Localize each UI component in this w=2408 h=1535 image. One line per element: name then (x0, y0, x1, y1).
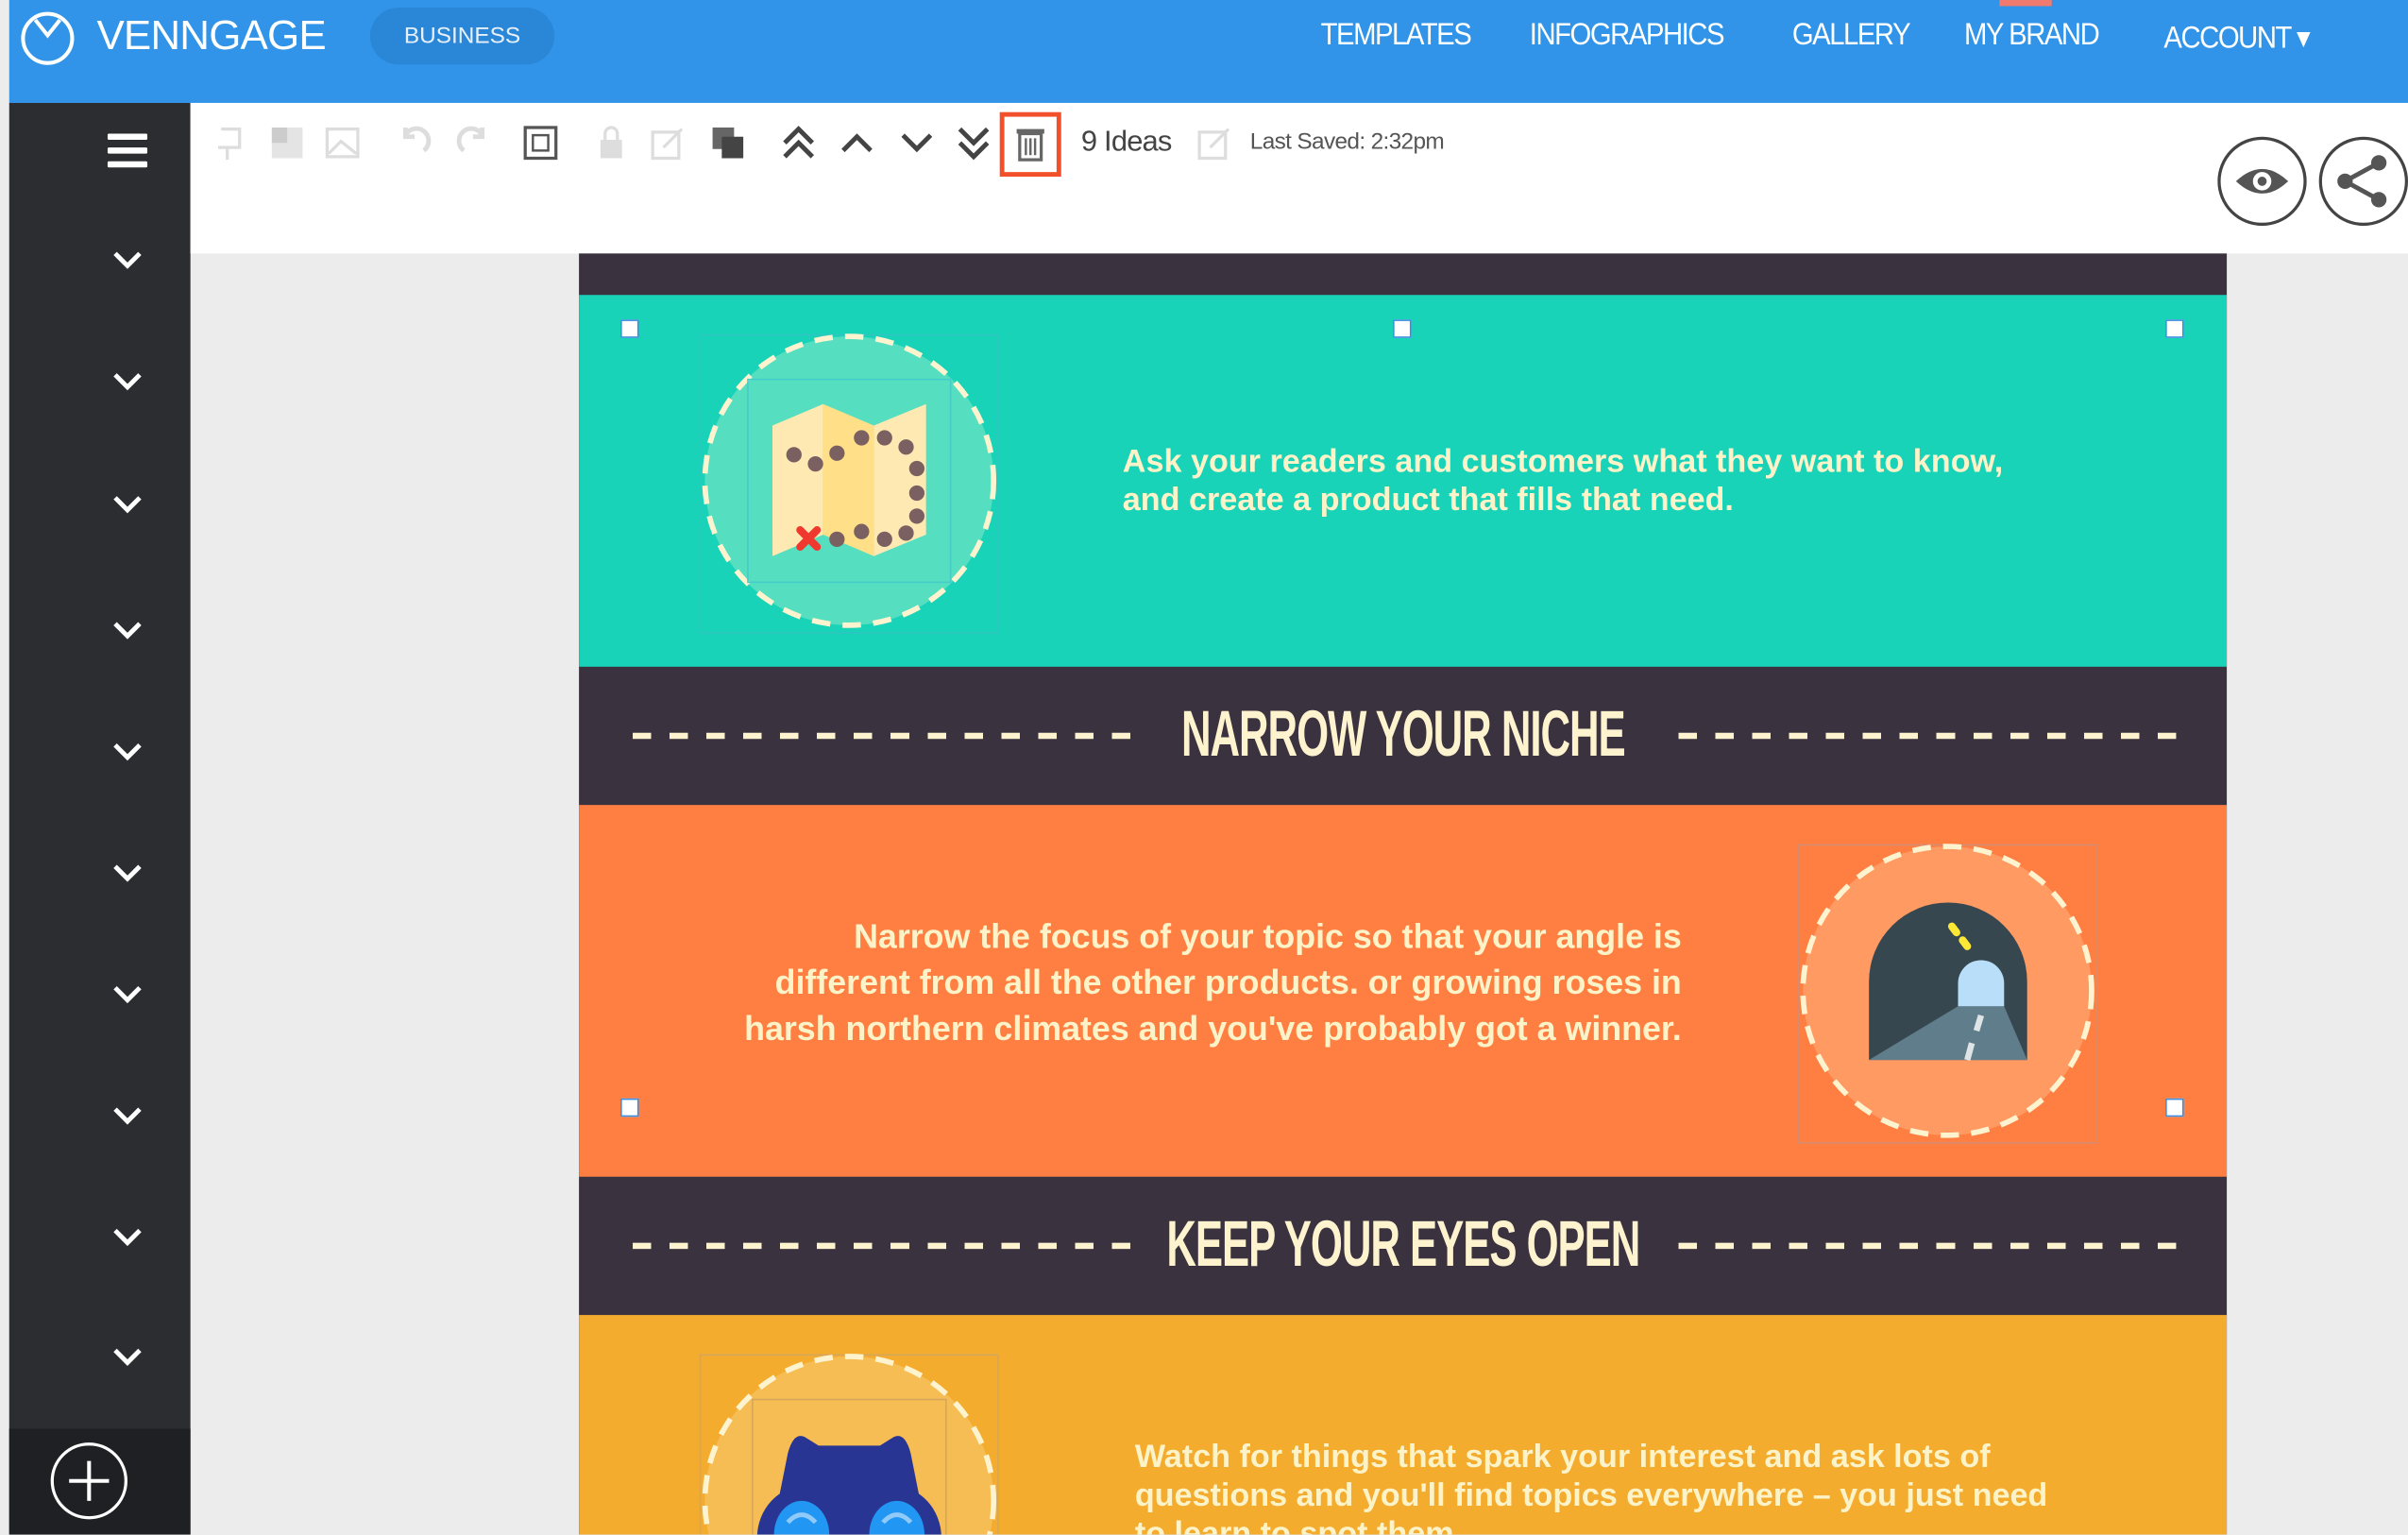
selection handles (620, 1098, 2184, 1117)
heading: keep your eyes open (633, 1207, 2176, 1280)
top navigation bar (9, 0, 2408, 103)
icon: tunnel (1798, 844, 2097, 1144)
tool icons (218, 111, 1444, 178)
heading: narrow your niche: NARROW YOUR NICHE (1181, 697, 1624, 770)
trash icon highlighted (1000, 112, 1061, 177)
add button (9, 1428, 191, 1535)
selection handles (620, 319, 2184, 338)
heading: keep your eyes open: KEEP YOUR EYES OPEN (1166, 1207, 1639, 1280)
heading: narrow your niche (633, 697, 2176, 770)
last saved: Last Saved: 2:32pm (1250, 129, 1444, 155)
panel: teal section (579, 295, 2227, 667)
chevrons (113, 251, 142, 1366)
nav links: ACCOUNT ▾ (2163, 22, 2309, 56)
icon: treasure map (699, 333, 999, 634)
logo icon (21, 11, 74, 65)
business badge: BUSINESS (404, 23, 520, 49)
preview button (2217, 136, 2307, 227)
panel: orange section (579, 805, 2227, 1177)
logo text: VENNGAGE (96, 12, 326, 59)
ideas label: 9 Ideas (1081, 126, 1172, 159)
infographic canvas (579, 253, 2227, 1535)
nav links (1321, 19, 2311, 56)
nav links: INFOGRAPHICS (1530, 19, 1723, 52)
nav links: MY BRAND (1964, 19, 2098, 52)
icon: binoculars (699, 1354, 999, 1534)
panel: yellow section (579, 1315, 2227, 1535)
nav links: GALLERY (1792, 19, 1909, 52)
left sidebar (9, 103, 191, 1535)
nav links: TEMPLATES (1321, 19, 1470, 52)
red notification tab (1999, 0, 2052, 7)
business badge (370, 8, 554, 64)
share button (2319, 136, 2408, 227)
text: narrow the focus: Narrow the focus of your topic so that your angle is different from all the other products. or growing roses in harsh northern climates and you've probably got a winner. (744, 917, 1682, 1048)
text: ask your readers: Ask your readers and customers what they want to know, and create a product that fills that need. (1123, 444, 2003, 518)
toolbar (191, 103, 2408, 253)
hamburger icon (108, 134, 147, 168)
